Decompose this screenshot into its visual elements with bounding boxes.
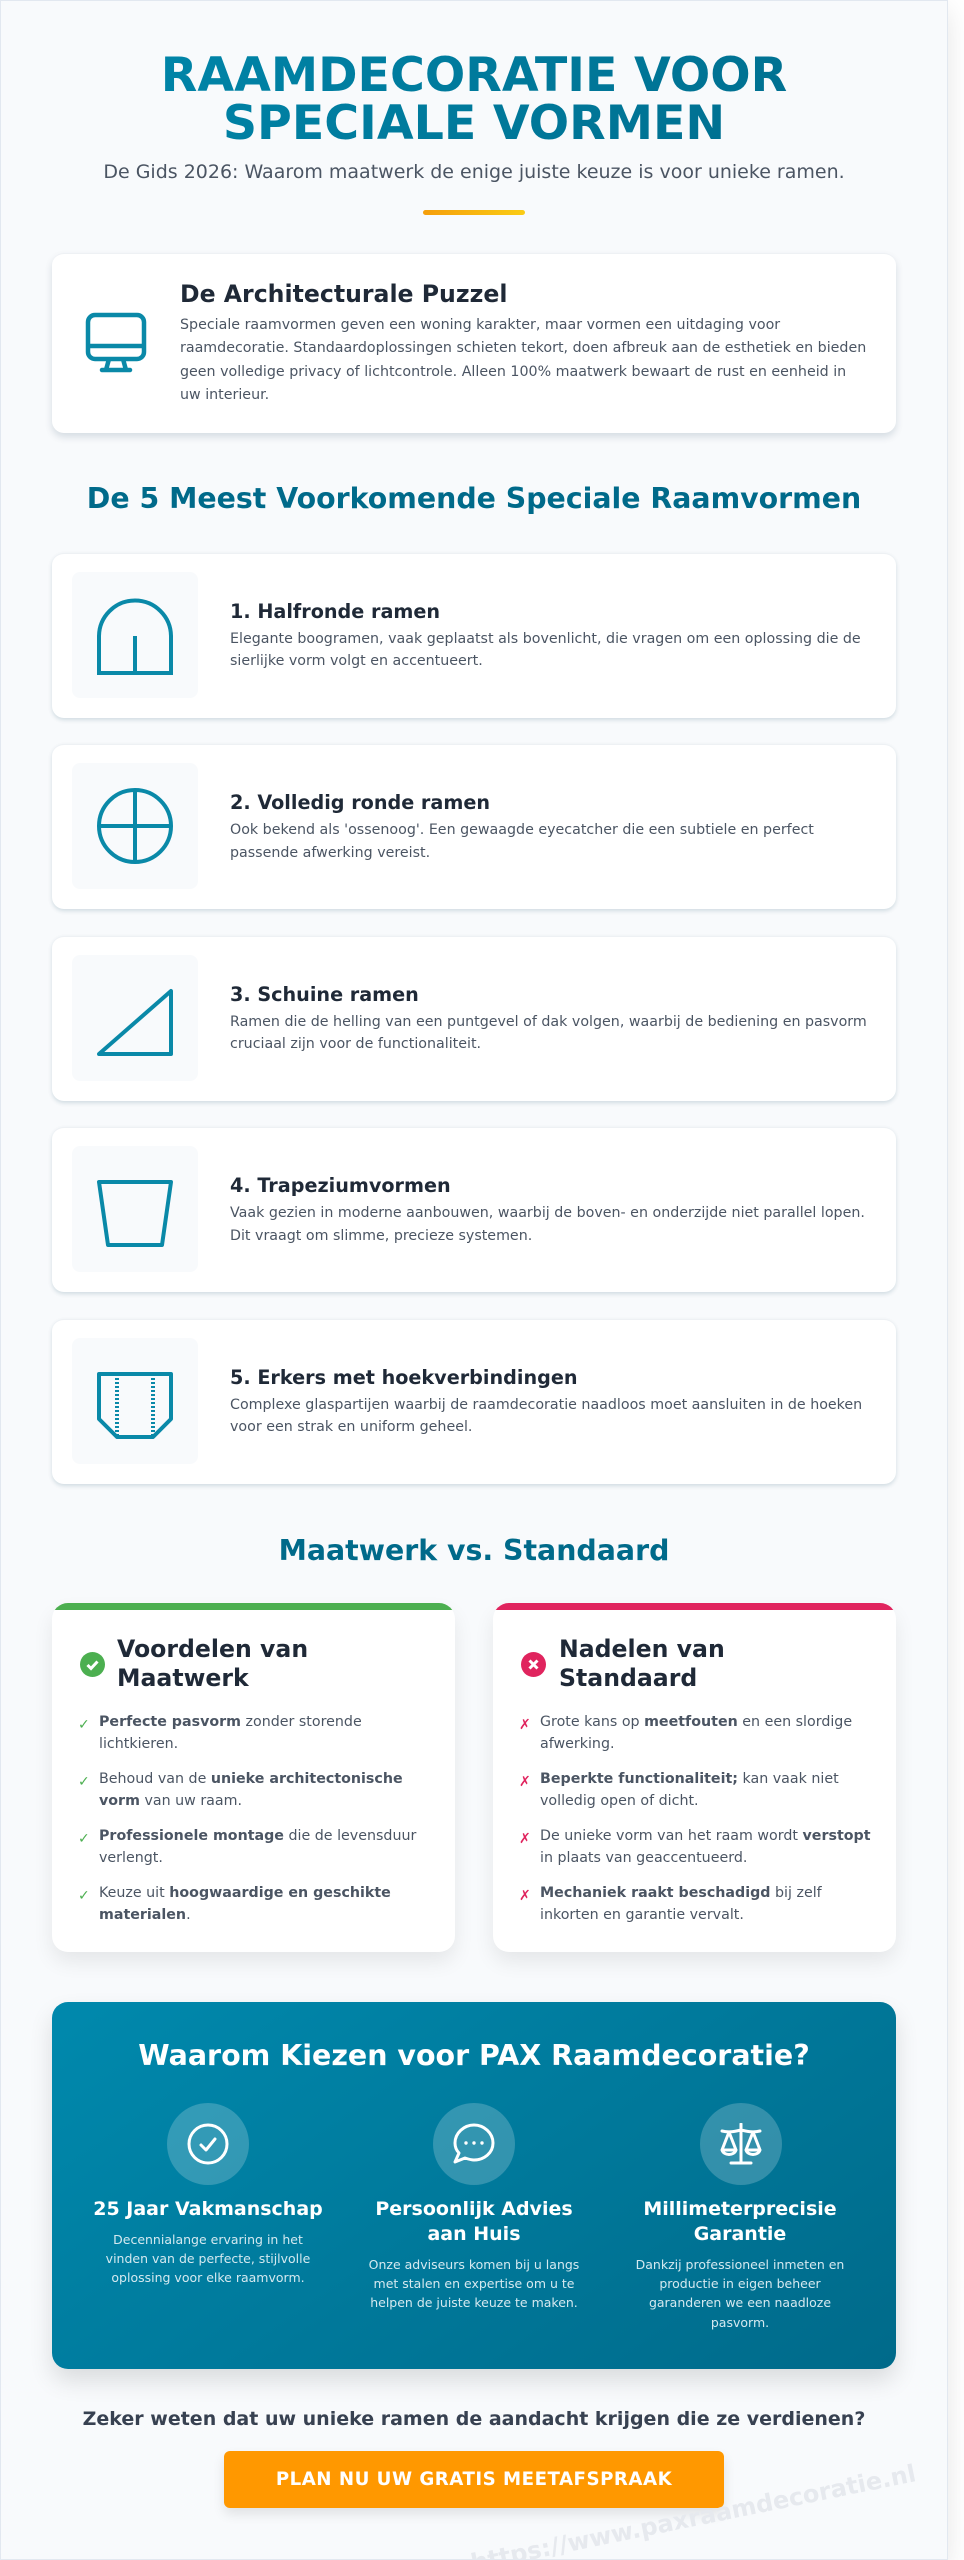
panel: shape 4: Vaak gezien in moderne aanbouwen, waarbij de boven- en onderzijde niet parallel lopen. [230, 1205, 865, 1221]
disadvantages list: ✗ [519, 1774, 531, 1790]
shape 5 text: 5. Erkers met hoekverbindingen [230, 1366, 578, 1389]
panel: why PAX [52, 2002, 896, 2369]
feature: precision guarantee [636, 2198, 844, 2330]
advantages list: verlengt. [99, 1850, 163, 1866]
icon: trapezium window [72, 1146, 198, 1272]
panel: shape 2: Ook bekend als 'ossenoog'. Een gewaagde eyecatcher die een subtiele en perfect [230, 822, 814, 838]
disadvantages list: Grote kans op meetfouten en een slordige [540, 1714, 852, 1730]
disadvantages list: inkorten en garantie vervalt. [540, 1907, 744, 1923]
feature: precision guarantee: pasvorm. [711, 2315, 769, 2330]
icon: chat bubble [433, 2103, 515, 2185]
feature: craftsmanship: vinden van de perfecte, stijlvolle [106, 2251, 310, 2266]
disadvantages list: afwerking. [540, 1736, 615, 1752]
feature: craftsmanship: Decennialange ervaring in het [113, 2232, 303, 2247]
icon: monitor [86, 312, 146, 372]
call to action button [224, 2451, 724, 2508]
advantages list: Behoud van de unieke architectonische [99, 1771, 403, 1787]
panel: disadvantages of standard [493, 1603, 896, 1952]
feature: precision guarantee: productie in eigen beheer [659, 2276, 821, 2291]
panel: architectural puzzle intro [52, 253, 896, 433]
subtitle: De Gids 2026: Waarom maatwerk de enige juiste keuze is voor unieke ramen. [103, 161, 845, 183]
disadvantages list: ✗ [519, 1888, 531, 1904]
disadvantages list: in plaats van geaccentueerd. [540, 1850, 747, 1866]
advantages list: Professionele montage die de levensduur [99, 1828, 416, 1844]
disadvantages list: ✗ [519, 1717, 531, 1733]
advantages heading: Maatwerk [117, 1664, 249, 1692]
disadvantages list: Beperkte functionaliteit; kan vaak niet [540, 1771, 839, 1787]
advantages list: materialen. [99, 1907, 191, 1923]
intro text [180, 317, 866, 403]
panel: shape 2 [52, 744, 896, 909]
feature: personal advice: aan Huis [427, 2223, 521, 2245]
feature: precision guarantee: Millimeterprecisie [643, 2198, 837, 2220]
shape 2 text: 2. Volledig ronde ramen [230, 791, 490, 814]
title: RAAMDECORATIE VOOR [161, 48, 787, 103]
icon: slanted window [72, 955, 198, 1081]
icon: craftsmanship check [167, 2103, 249, 2185]
why PAX heading: Waarom Kiezen voor PAX Raamdecoratie? [138, 2039, 810, 2072]
feature: precision guarantee: garanderen we een naadloze [649, 2295, 831, 2310]
panel: shape 2: passende afwerking vereist. [230, 845, 430, 861]
panel: shape 5: Complexe glaspartijen waarbij de raamdecoratie naadloos moet aansluiten in de hoeken [230, 1397, 862, 1413]
advantages list [78, 1714, 416, 1923]
advantages list: lichtkieren. [99, 1736, 178, 1752]
disadvantages list: ✗ [519, 1831, 531, 1847]
shape 1 text: 1. Halfronde ramen [230, 600, 440, 623]
advantages list: Keuze uit hoogwaardige en geschikte [99, 1885, 391, 1901]
panel: shape 1: sierlijke vorm volgt en accentueert. [230, 653, 483, 669]
disadvantages list: Mechaniek raakt beschadigd bij zelf [540, 1885, 822, 1901]
panel: shape 3: cruciaal zijn voor de functionaliteit. [230, 1036, 481, 1052]
shape 4 text: 4. Trapeziumvormen [230, 1174, 451, 1197]
intro heading: De Architecturale Puzzel [180, 280, 507, 308]
shape 3 text: 3. Schuine ramen [230, 983, 419, 1006]
intro text: geen volledige privacy of lichtcontrole. Alleen 100% maatwerk bewaart de rust en eenheid in [180, 364, 846, 380]
disadvantages list [519, 1714, 871, 1923]
panel: shape 1: Elegante boogramen, vaak geplaatst als bovenlicht, die vragen om een oplossing die de [230, 631, 861, 647]
panel: shape 3 [52, 936, 896, 1101]
disadvantages list: volledig open of dicht. [540, 1793, 699, 1809]
title: SPECIALE VORMEN [223, 96, 725, 151]
panel: advantages of custom [52, 1603, 455, 1952]
advantages heading [117, 1635, 308, 1692]
feature: craftsmanship: oplossing voor elke raamvorm. [111, 2270, 305, 2285]
feature: craftsmanship: 25 Jaar Vakmanschap [93, 2198, 323, 2220]
intro text: Speciale raamvormen geven een woning karakter, maar vormen een uitdaging voor [180, 317, 780, 333]
icon: bay window [72, 1338, 198, 1464]
heading: five shapes: De 5 Meest Voorkomende Speciale Raamvormen [87, 482, 861, 515]
advantages heading: Voordelen van [117, 1635, 308, 1663]
icon: round window [72, 763, 198, 889]
disadvantages list: De unieke vorm van het raam wordt verstopt [540, 1828, 871, 1844]
panel: shape 4: Dit vraagt om slimme, precieze systemen. [230, 1228, 532, 1244]
panel: shape 5 [52, 1319, 896, 1484]
call to action button: PLAN NU UW GRATIS MEETAFSPRAAK [276, 2469, 672, 2490]
feature: precision guarantee: Garantie [694, 2223, 786, 2245]
panel: shape 3: Ramen die de helling van een puntgevel of dak volgen, waarbij de bediening en pasvorm [230, 1014, 867, 1030]
intro text: raamdecoratie. Standaardoplossingen schieten tekort, doen afbreuk aan de esthetiek en bieden [180, 340, 866, 356]
feature: personal advice [369, 2198, 579, 2310]
icon: half-round window [72, 572, 198, 698]
feature: precision guarantee: Dankzij professioneel inmeten en [636, 2257, 844, 2272]
heading: comparison: Maatwerk vs. Standaard [279, 1534, 669, 1567]
panel: shape 4 [52, 1127, 896, 1292]
disadvantages heading [559, 1635, 725, 1692]
intro text: uw interieur. [180, 387, 269, 403]
disadvantages heading: Nadelen van [559, 1635, 725, 1663]
icon: scales [700, 2103, 782, 2185]
panel: shape 1 [52, 553, 896, 718]
feature: personal advice: Onze adviseurs komen bij u langs [369, 2257, 579, 2272]
closing question: Zeker weten dat uw unieke ramen de aandacht krijgen die ze verdienen? [83, 2408, 865, 2430]
title [1, 52, 947, 148]
icon: red cross [521, 1652, 546, 1677]
advantages list: ✓ [78, 1888, 90, 1904]
panel: shape 5: voor een strak en uniform geheel. [230, 1419, 472, 1435]
advantages list: Perfecte pasvorm zonder storende [99, 1714, 362, 1730]
advantages list: ✓ [78, 1774, 90, 1790]
advantages list: ✓ [78, 1717, 90, 1733]
accent divider [423, 210, 525, 215]
advantages list: ✓ [78, 1831, 90, 1847]
disadvantages heading: Standaard [559, 1664, 697, 1692]
feature: personal advice: helpen de juiste keuze te maken. [370, 2295, 578, 2310]
feature: personal advice: met stalen en expertise om u te [374, 2276, 574, 2291]
feature: craftsmanship [93, 2198, 323, 2285]
icon: green check [80, 1652, 105, 1677]
feature: personal advice: Persoonlijk Advies [375, 2198, 573, 2220]
advantages list: vorm van uw raam. [99, 1793, 242, 1809]
